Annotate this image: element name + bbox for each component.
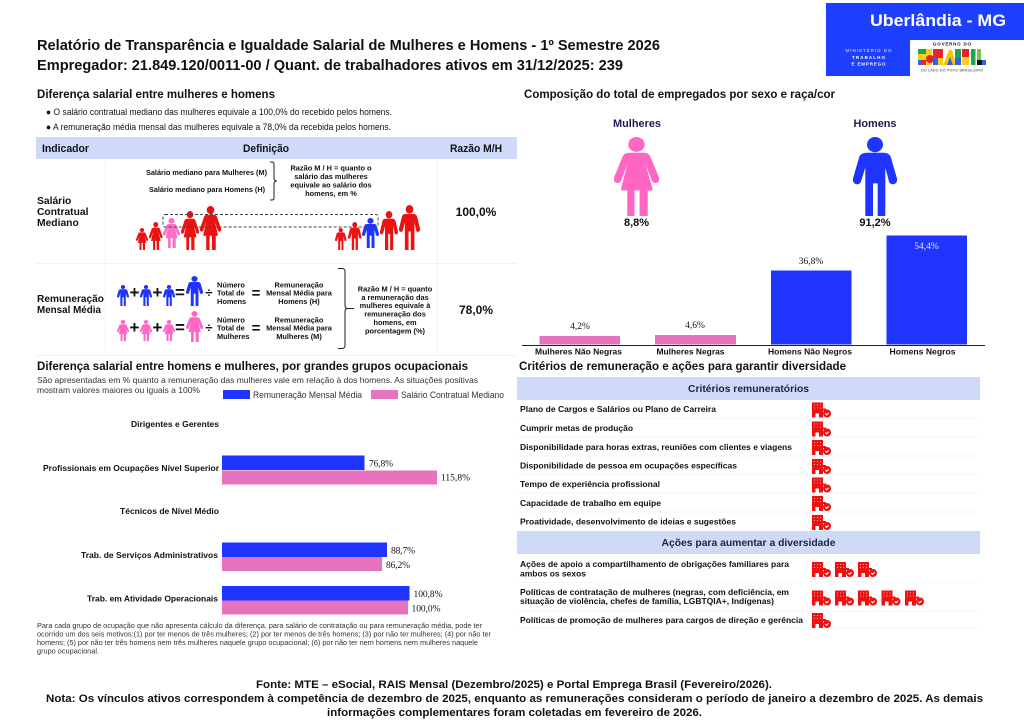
- indicator name: [37, 294, 104, 316]
- formula: men: Remuneração: [275, 280, 324, 290]
- bar values: 88,7%: [391, 546, 415, 556]
- actions header: [517, 531, 980, 554]
- ratio explanation: a remuneração das: [361, 293, 429, 302]
- action rows: Políticas de contratação de mulheres (negras, com deficiência, em: [520, 587, 789, 597]
- ministry label: [846, 47, 892, 66]
- indicator name: Mediano: [37, 218, 79, 229]
- criteria rows: Cumprir metas de produção: [520, 423, 633, 433]
- criteria header: Critérios remuneratórios: [688, 383, 809, 395]
- bar chart: composition by sex and race: 36,8%: [799, 257, 823, 267]
- definition labels: Salário mediano para Mulheres (M): [146, 168, 267, 177]
- formula: men: Total de: [217, 288, 245, 298]
- formula: women: Mulheres: [217, 332, 249, 341]
- ratio explanation: mulheres equivale à: [360, 301, 431, 310]
- bar chart: composition by sex and race: Homens Negros: [890, 346, 956, 356]
- formula: men: +: [130, 283, 140, 302]
- government of Brazil logo: [918, 42, 986, 72]
- panel: remuneration criteria: [517, 377, 980, 530]
- men figure: Homens: [854, 118, 896, 130]
- formula: women: Número: [217, 316, 245, 324]
- action rows: Ações de apoio a compartilhamento de obrigações familiares para: [520, 559, 789, 569]
- category labels: Profissionais em Ocupações Nível Superior: [43, 463, 220, 473]
- category labels: [43, 419, 220, 604]
- bar values: 76,8%: [369, 460, 393, 470]
- action rows: [520, 559, 803, 625]
- indicator name: Salário: [37, 196, 71, 207]
- formula: men: Mensal Média para: [266, 288, 333, 298]
- formula: men: [117, 276, 333, 306]
- women figure: [613, 118, 661, 229]
- bullet text block: [46, 107, 392, 132]
- category labels: Trab. em Atividade Operacionais: [87, 594, 218, 604]
- ratio value: 78,0%: [459, 303, 493, 317]
- ratio explanation: homens, em: [373, 318, 417, 327]
- category labels: Dirigentes e Gerentes: [131, 419, 219, 429]
- ratio explanation: Razão M / H = quanto o: [290, 164, 372, 172]
- heading: salary difference: Diferença salarial entre mulheres e homens: [37, 89, 275, 101]
- formula: women: Mensal Média para: [266, 324, 333, 332]
- footer source and note: [46, 679, 983, 719]
- criteria rows: Tempo de experiência profissional: [520, 479, 660, 489]
- footnote text: [37, 621, 491, 656]
- criteria rows: [520, 404, 792, 526]
- formula: men: =: [175, 283, 185, 302]
- formula: men: =: [252, 285, 261, 302]
- legend: [223, 390, 504, 400]
- table headers: Razão M/H: [450, 143, 502, 155]
- heading: occupational groups: Diferença salarial entre homens e mulheres, por grandes grupos ocupacionais: [37, 361, 468, 373]
- row: median contract salary: [37, 162, 497, 250]
- bar chart: composition by sex and race: [522, 236, 985, 356]
- criteria rows: Capacidade de trabalho em equipe: [520, 498, 661, 508]
- ratio explanation: [290, 164, 372, 198]
- bar values: [369, 460, 470, 614]
- ratio explanation: salário das mulheres: [294, 172, 368, 181]
- pictogram: women median: [136, 206, 221, 250]
- bar values: 86,2%: [386, 561, 410, 571]
- formula: men: Homens (H): [278, 297, 320, 306]
- formula: women: +: [153, 318, 163, 337]
- formula: men: Homens: [217, 297, 246, 306]
- criteria rows: Disponibilidade para horas extras, reuniões com clientes e viagens: [520, 442, 792, 452]
- row: average monthly pay: [37, 268, 493, 348]
- pictogram: men median: [335, 205, 420, 250]
- panel: composition by sex: [613, 118, 897, 229]
- ratio explanation: porcentagem (%): [365, 326, 426, 336]
- bullet text block: ● O salário contratual mediano das mulheres equivale a 100,0% do recebido pelos homens.: [46, 107, 392, 117]
- bar values: 100,0%: [412, 604, 441, 614]
- legend: Salário Contratual Mediano: [401, 390, 504, 400]
- bar chart: composition by sex and race: 54,4%: [914, 242, 939, 252]
- formula: men: ÷: [205, 285, 213, 300]
- ratio explanation: [358, 284, 433, 336]
- men figure: [853, 118, 897, 229]
- footer source and note: Fonte: MTE – eSocial, RAIS Mensal (Dezembro/2025) e Portal Emprega Brasil (Fevereiro/2026).: [256, 679, 772, 691]
- category labels: Trab. de Serviços Administrativos: [81, 550, 218, 560]
- title: [37, 38, 660, 74]
- bar chart: composition by sex and race: 4,2%: [570, 322, 590, 332]
- formula: women: Mulheres (M): [276, 332, 322, 341]
- definition labels: [146, 168, 267, 194]
- bar chart: pay gap by occupational group: [43, 419, 470, 614]
- definition labels: Salário mediano para Homens (H): [149, 185, 265, 194]
- title: Empregador: 21.849.120/0011-00 / Quant. de trabalhadores ativos em 31/12/2025: 239: [37, 58, 623, 74]
- indicator name: Remuneração: [37, 294, 104, 305]
- footnote text: ocorrido um dos seis motivos:(1) por ter menos de três mulheres; (2) por ter menos de três homens; (3) por não ter mulheres; (4) por não ter: [37, 630, 491, 638]
- bar chart: composition by sex and race: 4,6%: [685, 321, 705, 331]
- ministry label: MINISTÉRIO DO: [846, 47, 892, 53]
- indicator name: Mensal Média: [37, 305, 101, 316]
- formula: women: ÷: [205, 320, 213, 335]
- bar values: 100,8%: [414, 590, 443, 600]
- formula: women: Remuneração: [275, 316, 324, 324]
- bar chart: composition by sex and race: Homens Não Negros: [768, 346, 852, 356]
- action rows: ambos os sexos: [520, 568, 586, 578]
- action rows: Políticas de promoção de mulheres para cargos de direção e gerência: [520, 615, 803, 625]
- formula: women: Total de: [217, 324, 245, 332]
- header banner: location and logos: [826, 3, 1024, 76]
- bars: [222, 456, 364, 470]
- description text: São apresentadas em % quanto a remuneração das mulheres vale em relação à dos homens. As situações positivas: [37, 375, 478, 385]
- criteria header: [517, 377, 980, 400]
- bar values: 115,8%: [441, 474, 470, 484]
- heading: employee composition: Composição do total de empregados por sexo e raça/cor: [524, 89, 836, 101]
- action company icons: [812, 562, 924, 628]
- indicator name: [37, 196, 89, 229]
- criteria rows: Disponibilidade de pessoa em ocupações específicas: [520, 460, 737, 470]
- criteria rows: Plano de Cargos e Salários ou Plano de Carreira: [520, 404, 716, 414]
- criteria company icons: [812, 402, 831, 530]
- criteria rows: Proatividade, desenvolvimento de ideias e sugestões: [520, 516, 736, 526]
- footnote text: homens; (5) por não ter três homens nem três mulheres naquele grupo ocupacional; (6) por não ter nem homens nem mulheres naquele: [37, 638, 478, 647]
- ratio value: 100,0%: [456, 205, 497, 219]
- formula: men: +: [153, 283, 163, 302]
- formula: women: [117, 311, 333, 342]
- title: Relatório de Transparência e Igualdade Salarial de Mulheres e Homens - 1º Semestre 2026: [37, 38, 660, 54]
- formula: women: +: [130, 318, 140, 337]
- action rows: situação de violência, chefes de família, LGBTQIA+, Indígenas): [520, 596, 774, 606]
- formula: women: =: [175, 318, 185, 337]
- description text: mostram valores maiores ou iguais a 100%: [37, 385, 200, 395]
- indicator name: Contratual: [37, 207, 89, 218]
- government of Brazil logo: DO LADO DO POVO BRASILEIRO: [921, 68, 983, 72]
- ministry label: TRABALHO: [852, 55, 885, 60]
- bullet text block: ● A remuneração média mensal das mulheres equivale a 78,0% da recebida pelos homens.: [46, 122, 391, 132]
- category labels: Técnicos de Nível Médio: [120, 506, 219, 516]
- table headers: [42, 143, 502, 155]
- ratio explanation: homens, em %: [305, 189, 357, 198]
- footnote text: Para cada grupo de ocupação que não apresenta cálculo da diferença, para salário de contratação ou para remuneração média, pode ter: [37, 621, 482, 630]
- women figure: Mulheres: [613, 118, 661, 130]
- government of Brazil logo: GOVERNO DO: [933, 42, 971, 46]
- footer source and note: informações complementares foram coletadas em fevereiro de 2026.: [327, 707, 702, 719]
- table headers: Indicador: [42, 143, 90, 155]
- ministry label: E EMPREGO: [852, 62, 886, 66]
- legend: Remuneração Mensal Média: [253, 390, 362, 400]
- formula: men: Número: [217, 280, 245, 290]
- ratio explanation: remuneração dos: [364, 310, 426, 318]
- bar chart: composition by sex and race: Mulheres Não Negras: [535, 346, 622, 356]
- table headers: Definição: [243, 143, 289, 155]
- men figure: 91,2%: [859, 217, 891, 229]
- ratio explanation: Razão M / H = quanto: [358, 284, 433, 294]
- formula: women: =: [252, 320, 261, 337]
- actions header: Ações para aumentar a diversidade: [662, 537, 836, 549]
- women figure: 8,8%: [624, 217, 649, 229]
- panel: indicator table: [36, 137, 517, 356]
- footnote text: grupo ocupacional.: [37, 646, 99, 656]
- description text: [37, 375, 478, 395]
- footer source and note: Nota: Os vínculos ativos correspondem à competência de dezembro de 2025, enquanto as remunerações consideram o período de janeiro a dezembro de 2025. As demais: [46, 693, 983, 705]
- location name: Uberlândia - MG: [870, 12, 1006, 30]
- bar chart: composition by sex and race: Mulheres Negras: [656, 346, 725, 356]
- heading: criteria and actions: Critérios de remuneração e ações para garantir diversidade: [519, 361, 846, 373]
- ratio explanation: equivale ao salário dos: [290, 180, 372, 190]
- panel: diversity actions: [517, 531, 980, 628]
